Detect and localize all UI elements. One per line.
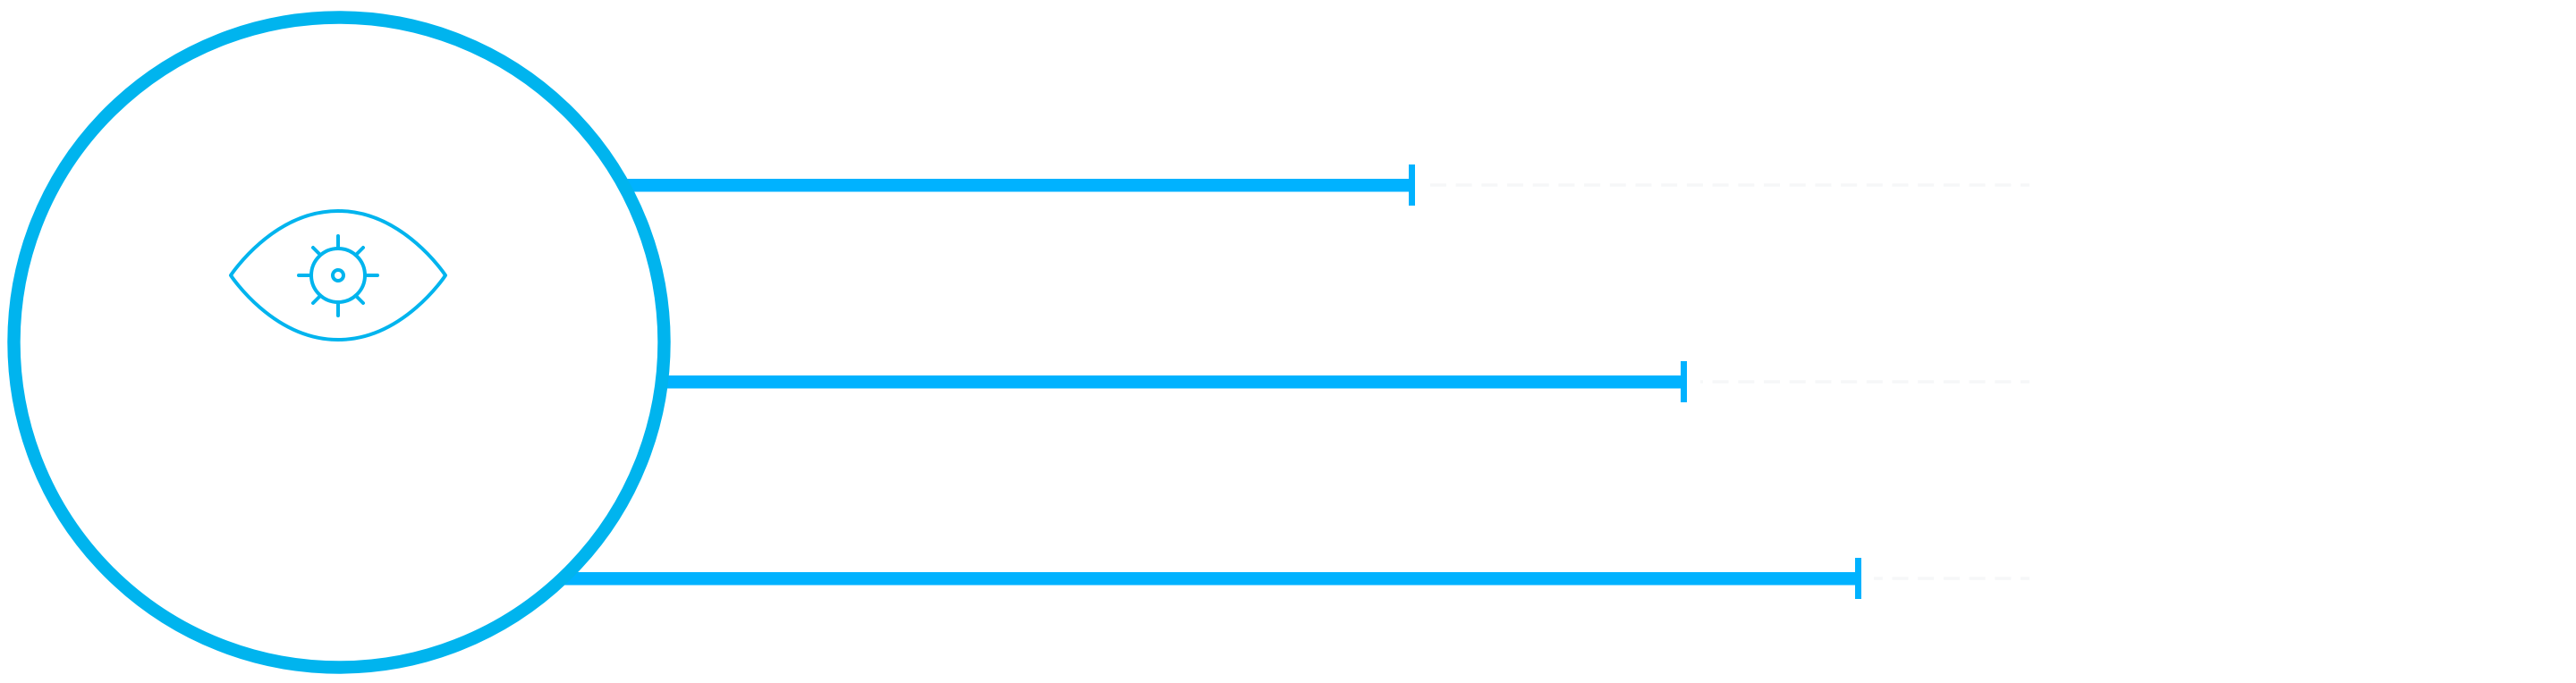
faint dashed guide 3 [1874,577,2029,580]
faint dashed guide 1 [1428,183,2029,187]
icon: eye [231,211,445,340]
bar 3 with end cap [447,558,1861,599]
large circle [14,18,664,667]
bar 1 with end cap [447,164,1415,206]
faint dashed guide 2 [1700,380,2029,384]
bar 2 with end cap [447,361,1687,402]
